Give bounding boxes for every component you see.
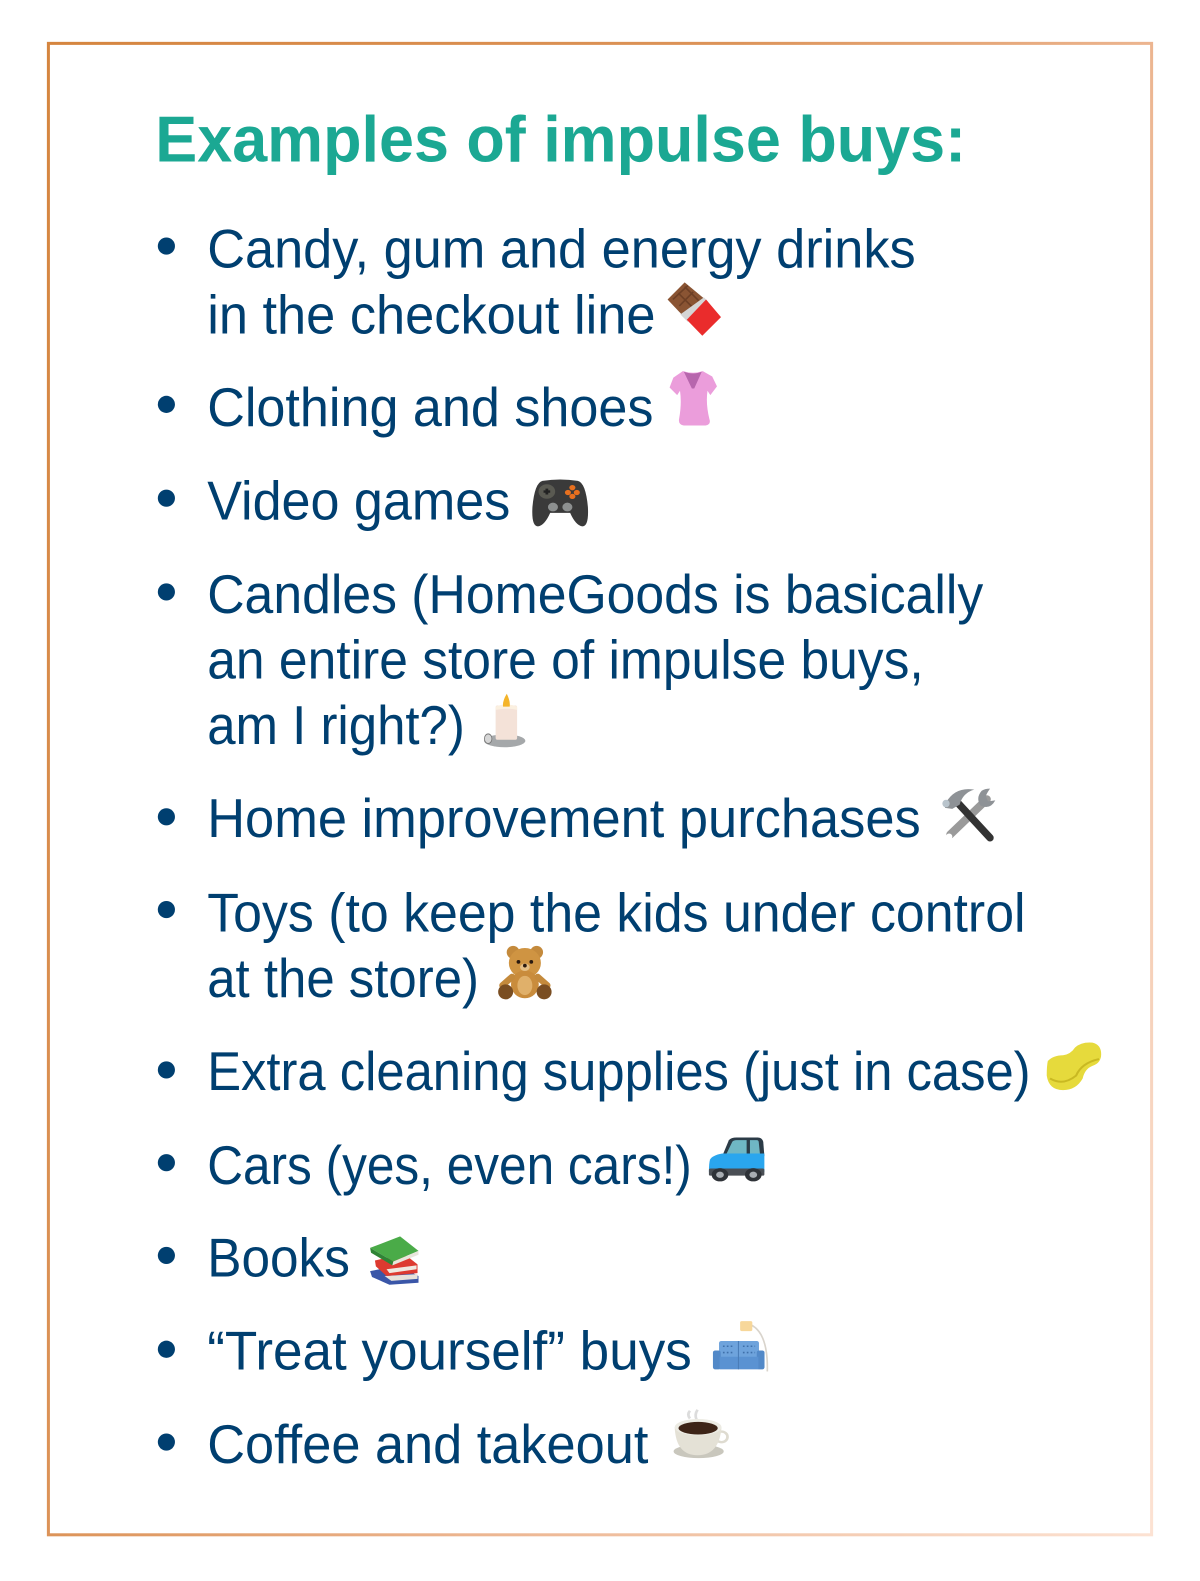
icon: game controller: [532, 479, 588, 526]
item: toys: [158, 882, 1026, 1009]
item: home improvement: Home improvement purchases: [207, 788, 921, 849]
icon: chocolate bar: [668, 282, 721, 336]
item: video games: Video games: [207, 470, 510, 531]
item: toys: Toys (to keep the kids under control: [207, 882, 1026, 943]
item: candy: in the checkout line: [207, 284, 655, 345]
item: coffee and takeout: Coffee and takeout: [207, 1414, 648, 1475]
icon: blue car: [709, 1137, 764, 1181]
item: books: Books: [207, 1228, 350, 1289]
item: cleaning supplies: Extra cleaning supplies (just in case): [207, 1041, 1031, 1102]
item: candy: [158, 219, 916, 345]
item: treat yourself: “Treat yourself” buys: [207, 1320, 692, 1381]
icon: yellow sponge: [1047, 1043, 1101, 1090]
item: cars: Cars (yes, even cars!): [207, 1135, 692, 1196]
item: candles: am I right?): [207, 695, 465, 756]
item: toys: at the store): [207, 948, 479, 1009]
icon: candle: [484, 694, 525, 747]
icon: sofa and lamp: [713, 1321, 767, 1371]
item: candles: [158, 564, 984, 756]
item: clothing: Clothing and shoes: [207, 377, 653, 438]
item: candy: Candy, gum and energy drinks: [207, 219, 916, 280]
item: candles: Candles (HomeGoods is basically: [207, 564, 984, 625]
icon: teddy bear: [498, 946, 552, 999]
icon: stack of books: [370, 1236, 418, 1285]
list of impulse buys: [158, 219, 1101, 1475]
icon: coffee cup: [674, 1410, 728, 1458]
item: candles: an entire store of impulse buys,: [207, 630, 924, 691]
icon: pink blouse: [670, 371, 717, 426]
icon: hammer and wrench: [942, 789, 995, 840]
title: Examples of impulse buys:: [155, 103, 966, 175]
